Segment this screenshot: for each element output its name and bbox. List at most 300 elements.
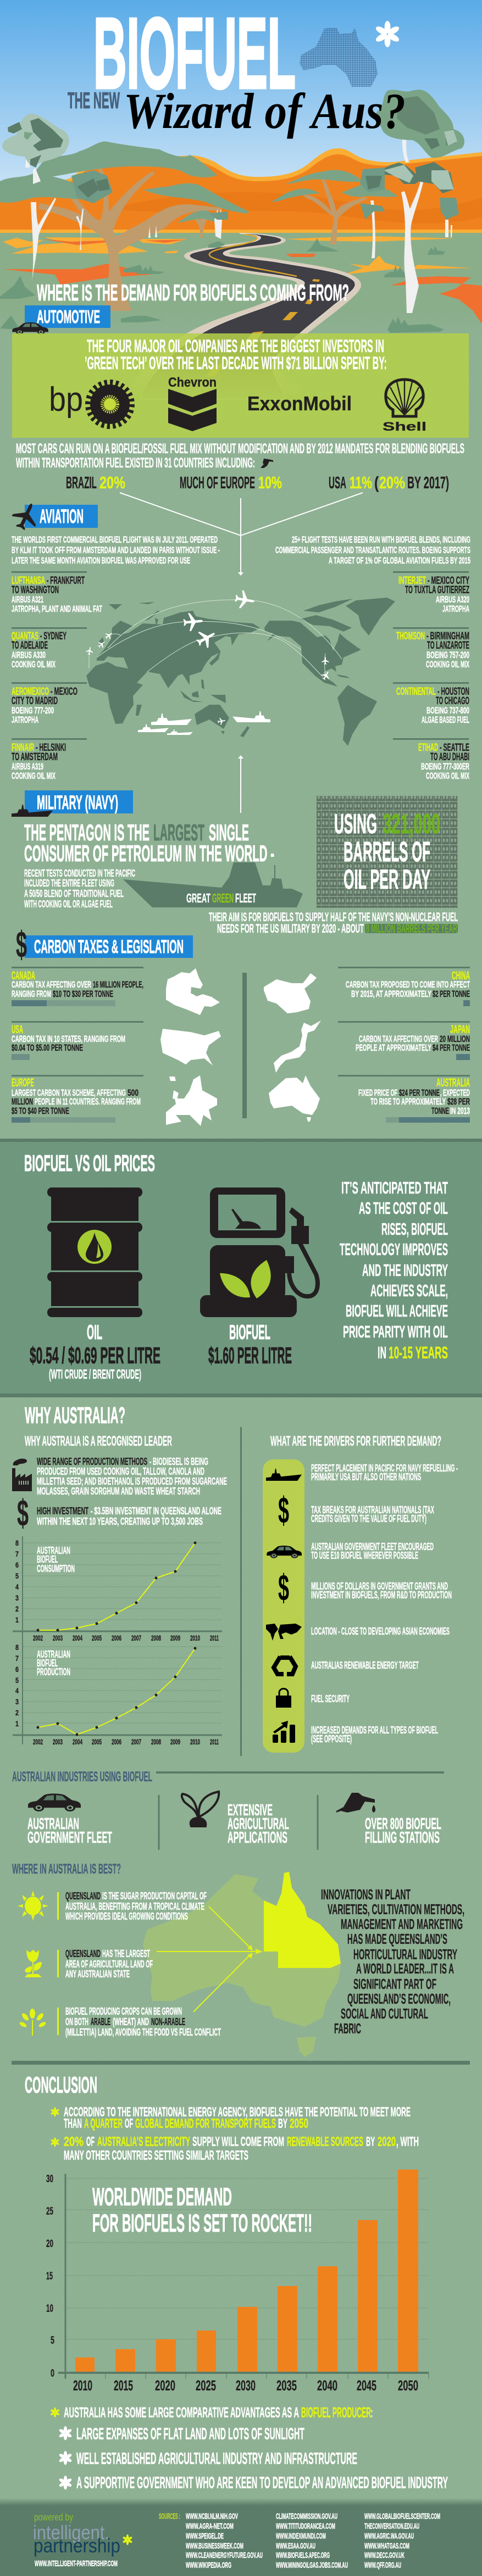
carbon tax: australia: TONNE — [431, 1106, 449, 1116]
industry: government fleet: AUSTRALIAN — [27, 1815, 79, 1833]
airline list: left column: - FRANKFURT — [47, 575, 85, 587]
fact: arable land — [19, 2006, 221, 2038]
bar chart: worldwide demand: 0 — [51, 2368, 54, 2379]
section label: carbon taxes: CARBON TAXES & LEGISLATION — [34, 936, 184, 957]
bar chart: worldwide demand: 2020 — [155, 2377, 175, 2394]
line chart: biofuel production: 2007 — [131, 1737, 141, 1746]
icon: ship — [266, 1469, 302, 1481]
airline list: left column: COOKING OIL MIX — [12, 659, 56, 670]
sources: WWW.BUSINESSWEEK.COM — [186, 2541, 243, 2551]
line chart: biofuel production: 4 — [15, 1686, 19, 1695]
title block: THE NEW — [68, 87, 120, 113]
logo: chevron — [168, 375, 217, 431]
map: china — [264, 973, 317, 1013]
airline list: left column: TO ADELAIDE — [12, 640, 48, 651]
fact: arable land: ON BOTH — [65, 2016, 88, 2027]
carbon tax: europe — [12, 1075, 217, 1126]
title block — [68, 0, 406, 139]
callout: barrels per day: 321,000 — [383, 809, 440, 839]
logo: shell: Shell — [383, 420, 426, 433]
fact: arable land: ARABLE — [91, 2016, 110, 2027]
airline list: right column — [393, 571, 469, 781]
text: production methods — [37, 1456, 227, 1497]
carbon tax: china: BY 2015, AT APPROXIMATELY — [351, 989, 431, 999]
oil price: OIL — [87, 1321, 102, 1343]
carbon tax: australia: FIXED PRICE OF — [358, 1088, 397, 1098]
section label: automotive — [12, 305, 110, 334]
mandate figures: 11% — [350, 473, 372, 492]
airline list: left column: AIRBUS A319 — [12, 761, 43, 772]
text: production methods: MOLASSES, GRAIN SORGHUM AND WASTE WHEAT STARCH — [37, 1486, 200, 1497]
heading: pentagon: THE PENTAGON IS THE — [24, 819, 149, 845]
acacia trunks — [38, 166, 220, 311]
airline list: right column: INTERJET — [398, 575, 426, 587]
airline list: left column: - HELSINKI — [36, 742, 66, 754]
line chart: biofuel consumption: 3 — [15, 1593, 19, 1602]
sources: WWW.AGRA-NET.COM — [186, 2522, 234, 2531]
icon: recycle — [274, 1657, 296, 1674]
airline list: left column: AEROMEXICO — [12, 686, 49, 698]
biofuel price — [208, 1321, 292, 1368]
line chart: biofuel consumption: 8 — [15, 1538, 19, 1547]
section label: military: MILITARY (NAVY) — [37, 792, 118, 813]
line chart: biofuel consumption: 2005 — [92, 1633, 102, 1642]
bullet: renewable electricity: 20% — [64, 2134, 84, 2149]
carbon tax: canada: RANGING FROM — [12, 989, 51, 999]
icon: seedling — [182, 1792, 219, 1826]
sources: WWW.MININGOILGAS.JOBS.COM.AU — [276, 2561, 348, 2570]
bullet: renewable electricity: AUSTRALIA’S ELECTRICITY — [97, 2134, 190, 2149]
text: pacific tests: INCLUDED THE ENTIRE FLEET USING — [24, 878, 114, 889]
text: aviation facts left: LATER THE SAME MONTH AVIATION BIOFUEL WAS APPROVED FOR USE — [12, 555, 190, 566]
logo: shell — [383, 380, 426, 433]
bullet: renewable electricity: , WITH — [396, 2134, 419, 2149]
line chart: biofuel production: BIOFUEL — [37, 1658, 58, 1669]
bullet: renewable electricity — [51, 2134, 419, 2163]
sources: WWW.DECC.GOV.UK — [364, 2551, 405, 2560]
icon: plane — [9, 498, 43, 534]
icon: dotted Australia — [300, 27, 378, 87]
sources: WWW.CLEANENERGYFUTURE.GOV.AU — [186, 2551, 263, 2560]
bullet: iea potential: GLOBAL DEMAND FOR TRANSPORT FUELS — [135, 2116, 276, 2131]
brand: intelligent partnership — [33, 2512, 132, 2568]
icon: asterisk — [375, 21, 400, 47]
line chart: biofuel consumption: 2011 — [210, 1633, 219, 1642]
section label: military — [12, 790, 133, 817]
text: production methods: - BIODIESEL IS BEING — [149, 1456, 208, 1467]
carbon tax: canada: CANADA — [12, 969, 35, 982]
icon: car — [267, 1546, 302, 1558]
carbon tax: europe: EUROPE — [12, 1077, 34, 1089]
brand: intelligent partnership: partnership — [34, 2534, 120, 2557]
list: demand drivers: (SEE OPPOSITE) — [311, 1733, 352, 1744]
map: usa — [160, 1029, 221, 1066]
text: AGRICULTURAL — [228, 1815, 289, 1833]
map: japan — [274, 1021, 321, 1073]
oil price — [30, 1321, 160, 1382]
text: aviation facts left: BY KLM IT TOOK OFF FROM AMSTERDAM AND LANDED IN PARIS WITHOUT ISSUE - — [12, 545, 220, 555]
heading: where in australia: WHERE IN AUSTRALIA IS BEST? — [12, 1861, 121, 1877]
sources: SOURCES : — [159, 2512, 180, 2521]
line chart: biofuel consumption: 2009 — [170, 1633, 180, 1642]
callout: barrels per day — [317, 796, 458, 908]
logo: chevron: Chevron — [168, 375, 217, 390]
text: CONCLUSION — [25, 2072, 97, 2098]
naval fleet — [138, 711, 270, 735]
bar chart: worldwide demand: 15 — [46, 2271, 53, 2282]
airline list: right column: THOMSON — [396, 631, 425, 642]
text: high investment: WITHIN THE NEXT 10 YEARS, CREATING UP TO 3,500 JOBS — [37, 1516, 203, 1527]
airline list: left column: AIRBUS A321 — [12, 594, 43, 605]
text: production methods: MILLETTIA SEED; AND BIOETHANOL IS PRODUCED FROM SUGARCANE — [37, 1476, 227, 1487]
line chart: biofuel consumption: 2003 — [53, 1633, 63, 1642]
bar chart: worldwide demand: 2050 — [398, 2377, 418, 2394]
icon: dollar: $ — [278, 1490, 289, 1531]
section band: biofuel vs oil — [0, 1139, 482, 1397]
line chart: biofuel production: 2008 — [151, 1737, 161, 1746]
text: pacific tests — [24, 868, 135, 910]
airline list: left column: - SYDNEY — [40, 631, 67, 642]
line chart: biofuel consumption: 5 — [15, 1571, 19, 1580]
brand: intelligent partnership: intelligent. — [33, 2521, 109, 2544]
biofuel price: BIOFUEL — [229, 1321, 270, 1343]
subtitle: wizard of aus: Wizard of Aus? — [124, 83, 406, 139]
airline list: left column: LUFTHANSA — [12, 575, 45, 587]
fact: arable land: (WHEAT) AND — [113, 2016, 149, 2027]
grass tufts — [0, 238, 445, 333]
industry: government fleet — [27, 1794, 112, 1847]
airline list: left column — [12, 571, 102, 781]
carbon tax: europe: PEOPLE IN 11 COUNTRIES. RANGING FROM — [35, 1096, 141, 1107]
section label: automotive: AUTOMOTIVE — [37, 306, 100, 327]
icon: sprout — [25, 1950, 42, 1977]
icon: oil barrel — [47, 1187, 142, 1317]
text: high investment: - $3.5BN INVESTMENT IN QUEENSLAND ALONE — [91, 1506, 221, 1516]
line chart: biofuel consumption: 2004 — [73, 1633, 82, 1642]
bar chart: worldwide demand — [46, 2170, 429, 2394]
bullet: renewable electricity: 2020 — [378, 2134, 396, 2149]
mandate figures: USA — [329, 473, 346, 492]
airline list: left column: COOKING OIL MIX — [12, 771, 56, 781]
text: high investment: HIGH INVESTMENT — [37, 1506, 88, 1516]
line chart: biofuel production: 3 — [15, 1697, 19, 1706]
heading: australian industries: AUSTRALIAN INDUSTRIES USING BIOFUEL — [12, 1769, 152, 1785]
brand: intelligent partnership: WWW.INTELLIGENT-PARTNERSHIP.COM — [35, 2559, 118, 2568]
road — [123, 233, 361, 399]
map: australia — [269, 1075, 320, 1122]
line chart: biofuel consumption: 2007 — [131, 1633, 141, 1642]
bullet: iea potential: A QUARTER — [84, 2116, 123, 2131]
callout: barrels per day: USING — [334, 809, 377, 839]
mandate figures: ( — [374, 473, 379, 492]
carbon tax: japan — [274, 1021, 470, 1073]
mandate figures: 20% — [99, 473, 125, 492]
fact: arable land: NON-ARABLE — [151, 2016, 185, 2027]
heading: australian industries — [12, 1769, 444, 1785]
text: production methods: PRODUCED FROM USED COOKING OIL, TALLOW, CANOLA AND — [37, 1466, 204, 1477]
divider: why australia columns — [240, 1427, 242, 1756]
icon: navy ship — [12, 805, 53, 817]
logo: bp: bp — [49, 381, 83, 419]
text: aviation facts right — [275, 534, 470, 566]
list: demand drivers — [311, 1463, 458, 1744]
carbon tax: europe: $5 TO $40 PER TONNE — [12, 1106, 69, 1116]
icon: dollar: $ — [278, 1567, 289, 1609]
line chart: biofuel production: 1 — [15, 1719, 19, 1728]
world map with flight routes — [85, 589, 395, 746]
icon: factory — [12, 1459, 32, 1491]
line chart: biofuel production: 7 — [15, 1654, 19, 1663]
logo: bp — [49, 381, 131, 426]
airline list: left column: - MEXICO — [51, 686, 77, 698]
bar chart: worldwide demand: 2040 — [317, 2377, 337, 2394]
section band: biofuel vs oil: $1.60 PER LITRE — [208, 1342, 292, 1368]
icon: fuel nozzle — [336, 1793, 375, 1813]
text: : — [371, 2404, 373, 2421]
industry: agriculture: EXTENSIVE — [228, 1802, 273, 1819]
industry: agriculture: APPLICATIONS — [228, 1829, 287, 1847]
fact: agricultural land: QUEENSLAND — [65, 1948, 101, 1959]
bullet: iea potential — [51, 2105, 411, 2131]
fact: arable land: (MILLETTIA) LAND, AVOIDING THE FOOD VS FUEL CONFLICT — [65, 2027, 221, 2038]
line chart: biofuel production: 8 — [15, 1643, 19, 1652]
carbon tax: europe: MILLION — [12, 1096, 33, 1107]
bar chart: worldwide demand: 2035 — [276, 2377, 297, 2394]
bar chart: worldwide demand: 5 — [51, 2335, 54, 2346]
airline list: left column: JATROPHA, PLANT AND ANIMAL FAT — [12, 604, 102, 614]
carbon tax: australia — [269, 1075, 470, 1123]
icon: sun — [18, 1891, 48, 1921]
icon: plant — [19, 2009, 47, 2036]
text: queensland innovations: FABRIC — [334, 2020, 361, 2037]
text: pacific tests: WITH COOKING OIL OR ALGAE FUEL — [24, 899, 113, 910]
bullet: iea potential: BY — [278, 2116, 287, 2131]
icon: sedan — [28, 1794, 81, 1811]
sources: WWW.WHATGAS.COM — [364, 2541, 409, 2551]
line chart: biofuel production: 2002 — [33, 1737, 43, 1746]
carbon tax: australia: $24 PER TONNE — [399, 1088, 440, 1098]
heading: pentagon — [24, 819, 274, 866]
text: pacific tests: RECENT TESTS CONDUCTED IN THE PACIFIC — [24, 868, 135, 879]
fact: agricultural land: AREA OF AGRICULTURAL LAND OF — [65, 1959, 153, 1970]
airline list: left column: CITY TO MADRID — [12, 695, 58, 707]
bar chart: worldwide demand: 10 — [46, 2303, 53, 2315]
icon: rising bars — [273, 1721, 295, 1743]
line chart: biofuel consumption: CONSUMPTION — [37, 1563, 75, 1574]
airline list: left column: TO WASHINGTON — [12, 584, 59, 596]
map: australia with queensland highlighted — [143, 1872, 341, 2057]
bullet: renewable electricity: RENEWABLE SOURCES — [287, 2134, 363, 2149]
logo: exxonmobil: ExxonMobil — [247, 392, 352, 415]
bar chart: worldwide demand: 2010 — [73, 2377, 92, 2394]
fact: arable land: BIOFUEL PRODUCING CROPS CAN BE GROWN — [65, 2006, 182, 2017]
icon: biofuel pump — [200, 1187, 318, 1317]
section label: aviation: AVIATION — [40, 506, 84, 527]
flight routes — [89, 600, 342, 677]
industry: agriculture — [182, 1792, 289, 1847]
fact: agricultural land: HAS THE LARGEST — [102, 1948, 150, 1959]
airline list: left column: JATROPHA — [12, 715, 38, 725]
carbon tax: usa: $0.04 TO $5.00 PER TONNE — [12, 1042, 83, 1053]
industry: government fleet: GOVERNMENT FLEET — [27, 1829, 112, 1847]
line chart: biofuel production: 2003 — [53, 1737, 63, 1746]
line chart: biofuel consumption: BIOFUEL — [37, 1554, 58, 1565]
carbon tax: europe: 500 — [128, 1088, 138, 1098]
section band: biofuel vs oil: $0.54 / $0.69 PER LITRE — [30, 1342, 160, 1368]
bar chart: worldwide demand: 2025 — [196, 2377, 216, 2394]
map: europe — [166, 1075, 217, 1126]
text: pacific tests: A 50/50 BLEND OF TRADITIONAL FUEL — [24, 888, 124, 899]
hero illustration: outback landscape — [0, 0, 482, 399]
mandate figures — [66, 473, 449, 492]
text: aviation facts left: THE WORLDS FIRST COMMERCIAL BIOFUEL FLIGHT WAS IN JULY 2011. OPERATED — [12, 534, 218, 545]
panel: demand driver icons — [263, 1459, 304, 1753]
mandate figures: BRAZIL — [66, 473, 97, 492]
acacia canopies — [31, 142, 217, 180]
line chart: biofuel production: 5 — [15, 1676, 19, 1685]
sources: WWW.INDEXMUNDI.COM — [276, 2532, 326, 2541]
line chart: biofuel production: 2011 — [210, 1737, 219, 1746]
bullet: iea potential: OF — [125, 2116, 133, 2131]
panel: oil company investors — [12, 333, 469, 438]
line chart: biofuel production: PRODUCTION — [37, 1666, 70, 1677]
bar chart: worldwide demand: 2015 — [114, 2377, 133, 2394]
carbon tax: canada: 16 MILLION PEOPLE, — [93, 979, 143, 990]
line chart: biofuel production — [13, 1641, 222, 1746]
sources: CLIMATECOMMISSION.GOV.AU — [276, 2512, 337, 2521]
text: navy aim — [209, 910, 458, 935]
sources: WWW.QFF.ORG.AU — [364, 2561, 401, 2570]
list: demand drivers: FUEL SECURITY — [311, 1693, 350, 1704]
line chart: biofuel production: 2006 — [112, 1737, 121, 1746]
icon: dollar: $ — [16, 924, 27, 966]
carbon tax: canada: $10 TO $30 PER TONNE — [53, 989, 113, 999]
sources: WWW.AGRIC.WA.GOV.AU — [364, 2532, 414, 2541]
illustration: great green fleet ship: GREAT — [186, 891, 210, 905]
airline list: left column: AIRBUS A330 — [12, 650, 46, 660]
bars — [75, 2170, 418, 2372]
bullet: renewable electricity: SUPPLY WILL COME FROM — [192, 2134, 284, 2149]
mandate figures: BY 2017) — [407, 473, 449, 492]
line chart: biofuel production: AUSTRALIAN — [37, 1649, 70, 1660]
fact: sugar production — [18, 1891, 207, 1922]
sources: WWW.BIOFUELS.APEC.ORG — [276, 2551, 330, 2560]
line chart: biofuel consumption: 6 — [15, 1560, 19, 1569]
line chart: biofuel production: 6 — [15, 1665, 19, 1674]
oil price: (WTI CRUDE / BRENT CRUDE) — [49, 1367, 141, 1382]
icon: world — [266, 1624, 302, 1641]
illustration: great green fleet ship: FLEET — [235, 891, 256, 905]
airline list: left column: FINNAIR — [12, 742, 34, 754]
flight planes — [85, 589, 332, 726]
line chart: biofuel consumption — [13, 1536, 222, 1643]
text: high investment — [37, 1506, 221, 1527]
mandate figures: MUCH OF EUROPE — [180, 473, 255, 492]
fact: agricultural land: ANY AUSTRALIAN STATE — [65, 1969, 130, 1980]
illustration: great green fleet ship: GREEN — [212, 891, 234, 905]
sources: WWW.NCBI.NLM.NIH.GOV — [186, 2512, 238, 2521]
fact: sugar production: AUSTRALIA, BENEFITING FROM A TROPICAL CLIMATE — [65, 1901, 204, 1912]
icon: fuel nozzle small — [261, 459, 273, 468]
icon: dollar: $ — [17, 1492, 29, 1534]
illustration: great green fleet ship — [123, 862, 303, 907]
text: price parity: IN — [378, 1343, 386, 1362]
advantages list — [59, 2425, 448, 2492]
line chart: biofuel production: 2010 — [190, 1737, 200, 1746]
text: BIOFUEL PRODUCER — [301, 2404, 371, 2421]
icon: lock — [276, 1688, 291, 1708]
line chart: biofuel production: 2009 — [170, 1737, 180, 1746]
line chart: biofuel consumption: 2002 — [33, 1633, 43, 1642]
carbon tax: australia: IN 2013 — [450, 1106, 470, 1116]
gum trees — [25, 115, 452, 313]
text: queensland innovations — [321, 1886, 464, 2037]
text: production methods: WIDE RANGE OF PRODUCTION METHODS — [37, 1456, 147, 1467]
fact: sugar production: IS THE SUGAR PRODUCTION CAPITAL OF — [102, 1891, 207, 1902]
airline list: right column: CONTINENTAL — [396, 686, 436, 698]
bullet: renewable electricity: MANY OTHER COUNTRIES SETTING SIMILAR TARGETS — [64, 2148, 248, 2163]
heading: pentagon: SINGLE — [209, 819, 249, 845]
bar chart: worldwide demand: WORLDWIDE DEMAND — [92, 2183, 232, 2211]
line chart: biofuel consumption: 2010 — [190, 1633, 200, 1642]
text: price parity — [340, 1178, 448, 1362]
line chart: biofuel consumption: 1 — [15, 1615, 19, 1624]
bar chart: worldwide demand: 2030 — [236, 2377, 256, 2394]
carbon tax: europe: LARGEST CARBON TAX SCHEME, AFFECTING — [12, 1088, 126, 1098]
industry: filling stations — [336, 1793, 441, 1847]
text: blending mandates — [16, 441, 464, 471]
airline list: left column: BOEING 777-200 — [12, 705, 54, 716]
connector lines and arrows — [120, 493, 363, 813]
carbon tax: china — [264, 967, 470, 1013]
sources: WWW.ESAA.GOV.AU — [276, 2541, 315, 2551]
text: WHY AUSTRALIA IS A RECOGNISED LEADER — [25, 1434, 172, 1449]
bar chart: worldwide demand: 25 — [46, 2206, 53, 2217]
map: canada — [166, 968, 220, 1015]
fact: sugar production: QUEENSLAND — [65, 1891, 101, 1902]
mandate figures: 10% — [258, 473, 282, 492]
carbon tax: usa: USA — [12, 1023, 23, 1036]
line chart: biofuel consumption: 2008 — [151, 1633, 161, 1642]
heading: pentagon: LARGEST — [153, 819, 204, 845]
sources: WWW.WIKIPEDIA.ORG — [186, 2561, 231, 2570]
arrows — [157, 1906, 263, 2012]
carbon tax: canada: CARBON TAX AFFECTING OVER — [12, 979, 91, 990]
dividers: industries — [159, 1795, 318, 1850]
carbon tax: usa — [12, 1021, 221, 1066]
footer — [0, 2498, 482, 2576]
mandate figures: 20% — [379, 473, 405, 492]
sources: THECONVERSATION.EDU.AU — [364, 2522, 419, 2531]
line chart: biofuel consumption: AUSTRALIAN — [37, 1545, 70, 1556]
airline list: right column: ETIHAD — [418, 742, 438, 754]
line chart: biofuel production: 2005 — [92, 1737, 102, 1746]
carbon tax: usa: CARBON TAX IN 10 STATES, RANGING FROM — [12, 1034, 125, 1044]
sources: WWW.TITITUDORANCEA.COM — [276, 2522, 335, 2531]
airline list: left column: TO AMSTERDAM — [12, 751, 58, 763]
airline list: left column: QUANTAS — [12, 631, 38, 642]
sources — [159, 2512, 440, 2570]
sources: WWW.SPEIGEL.DE — [186, 2532, 224, 2541]
divider band: conclusion — [12, 2061, 470, 2065]
brand: intelligent partnership: powered by — [34, 2512, 73, 2523]
bullet: renewable electricity: OF — [86, 2134, 95, 2149]
line chart: biofuel consumption: 2 — [15, 1604, 19, 1613]
text: aviation facts left — [12, 534, 220, 566]
line chart: biofuel production: 2004 — [73, 1737, 82, 1746]
text: WHY AUSTRALIA? — [25, 1402, 125, 1428]
bar chart: worldwide demand: 20 — [46, 2238, 53, 2250]
